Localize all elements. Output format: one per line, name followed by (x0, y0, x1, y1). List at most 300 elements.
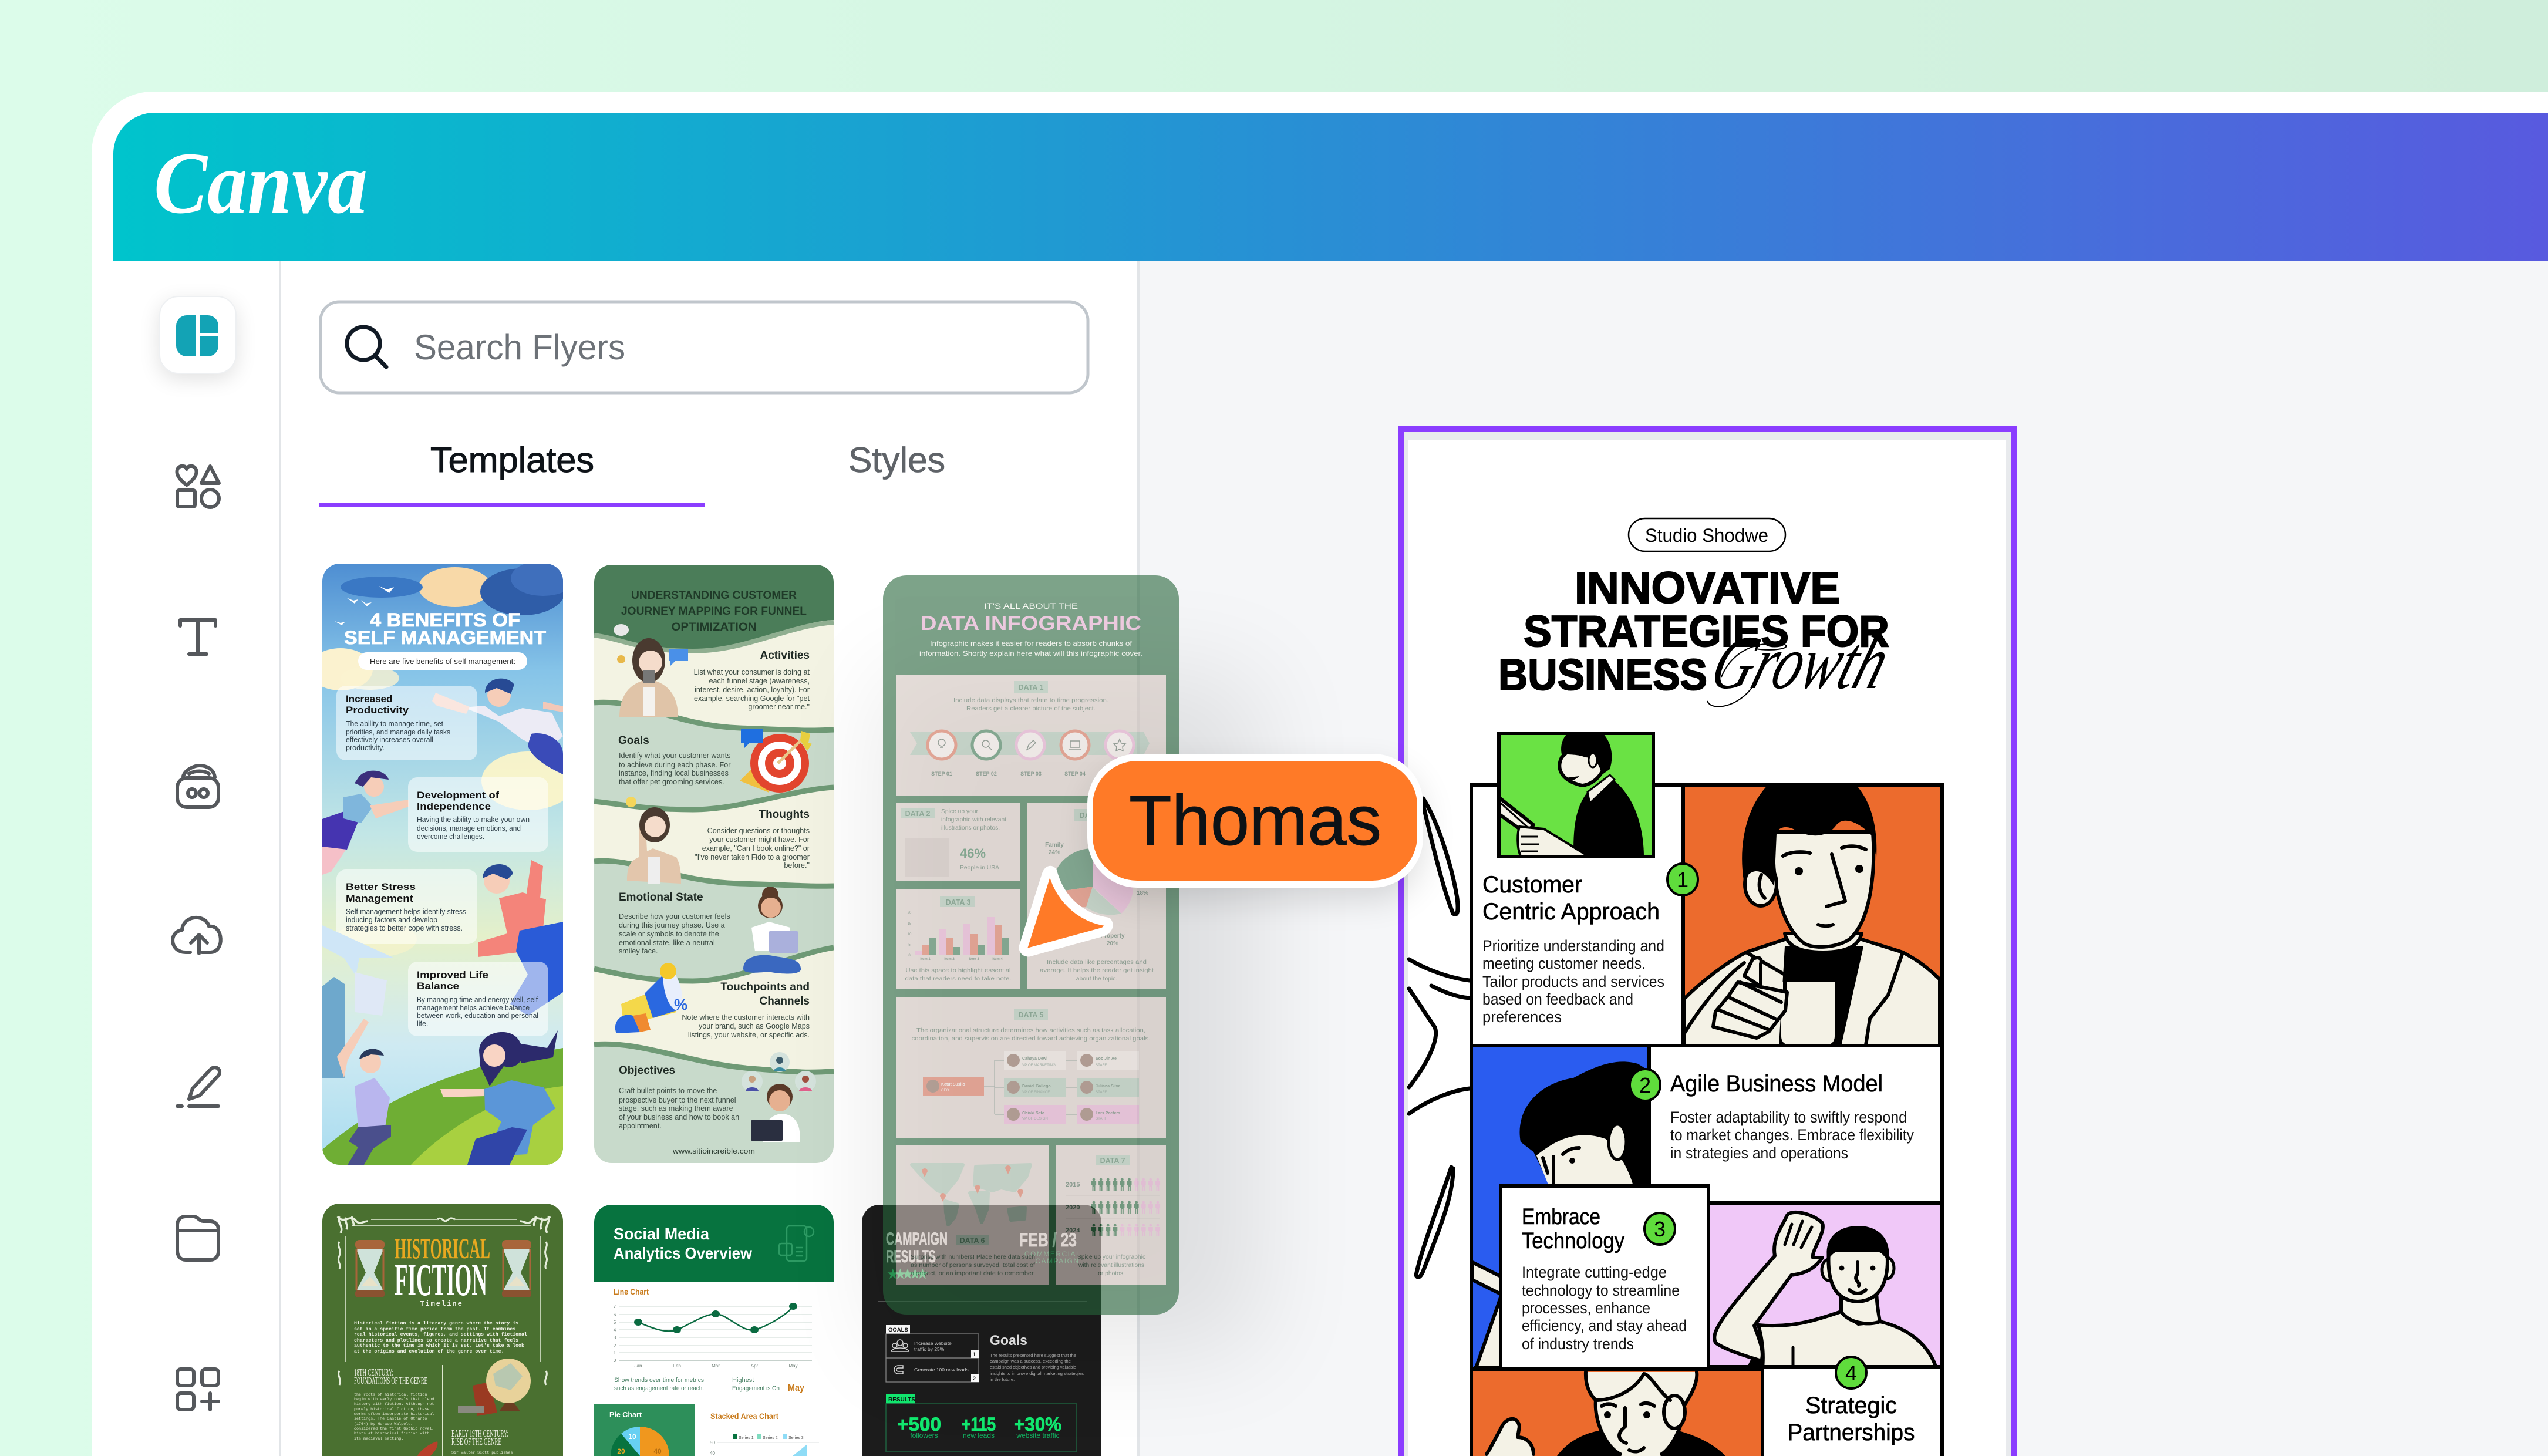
heading: UNDERSTANDING CUSTOMER (631, 589, 797, 602)
benefit: improved life balance: By managing time and energy well, self (417, 996, 538, 1004)
section: goals: that offer pet grooming services. (619, 778, 724, 786)
timeline entry (354, 1367, 434, 1441)
panel: data 4: 20% (1107, 941, 1118, 947)
org chart: STAFF (1096, 1063, 1107, 1067)
section: thoughts (695, 808, 810, 869)
title: Growth (1702, 620, 1900, 705)
panel: partnerships (1471, 1357, 1942, 1456)
illustration: pink panel man (1714, 1212, 1936, 1368)
section: emotional state: smiley face. (619, 947, 658, 955)
section: emotional state: scale or symbols to denote the (619, 930, 719, 938)
chart: bars: 15 (908, 922, 912, 926)
flyer in editor (1401, 429, 2014, 1456)
cursor arrow (1023, 870, 1108, 952)
illustration: megaphone: % (674, 996, 687, 1013)
panel: data 2: People in USA (960, 865, 999, 871)
chart: stacked area: Series 1 (739, 1436, 754, 1440)
heading: RESULTS (886, 1247, 936, 1266)
timeline entry: its medieval setting. (354, 1437, 403, 1441)
timeline entry: considered the first Gothic novel, (354, 1427, 434, 1431)
panel: data 1: Readers get a clearer picture of the subject. (966, 706, 1096, 712)
name tag: thomas (1087, 754, 1423, 888)
section: touchpoints: Touchpoints and (720, 981, 810, 993)
benefit: development of independence: decisions, manage emotions, and (417, 824, 521, 833)
chart: pie chart: Pie Chart (609, 1410, 642, 1419)
illustration: blue panel woman (1472, 1061, 1651, 1368)
chart: pie chart (594, 1404, 695, 1456)
benefit: development of independence: overcome challenges. (417, 833, 484, 841)
illustration: target (740, 729, 812, 793)
panel: data 4: 18% (1137, 890, 1148, 896)
panel: agile (1471, 1046, 1942, 1369)
template card: social media analytics (594, 1205, 834, 1456)
illustration: green panel man (1485, 725, 1653, 857)
chart note (614, 1377, 804, 1393)
chart: stacked area: 50 (710, 1440, 715, 1445)
heading: Timeline (420, 1300, 463, 1308)
org chart: Soo Jin Ae (1096, 1057, 1117, 1061)
panel: data 4: Include data like percentages and (1047, 959, 1147, 966)
search placeholder: Search Flyers (414, 328, 625, 367)
line art: background swooshes (1409, 798, 1470, 1277)
section: objectives: Craft bullet points to move the (619, 1087, 717, 1095)
logo: Canva (154, 134, 368, 232)
benefit: increased productivity: productivity. (346, 744, 385, 752)
heading: Embrace (1522, 1205, 1600, 1229)
drag shadow (883, 675, 1259, 1350)
card (1501, 1186, 1708, 1369)
heading: Analytics Overview (614, 1244, 752, 1262)
heading: Customer (1482, 872, 1582, 898)
panel: data 6: as number of persons surveyed, total cost of (911, 1262, 1035, 1269)
benefit: improved life balance (408, 962, 548, 1036)
illustration: building and hill (322, 972, 563, 1165)
chart: line chart: 7 (614, 1304, 616, 1309)
panel: templates (319, 261, 1140, 1456)
description: processes, enhance (1522, 1299, 1650, 1317)
chart note: such as engagement rate or reach. (614, 1385, 704, 1392)
panel: data 7: or photos. (1098, 1270, 1125, 1277)
panel: data 1: STEP 02 (976, 771, 997, 777)
illustration: thinking woman (626, 797, 681, 884)
dragged template: data infographic (883, 575, 1179, 1315)
panel: data 1: STEP 04 (1064, 771, 1086, 777)
panel: data 1 (896, 675, 1166, 796)
panel: data 1: STEP 03 (1020, 771, 1042, 777)
description: Foster adaptability to swiftly respond (1670, 1108, 1907, 1126)
heading: Partnerships (1787, 1420, 1915, 1445)
benefit: increased productivity: priorities, and manage daily tasks (346, 728, 450, 736)
benefit: improved life balance: Improved Life (417, 969, 488, 980)
section: emotional state (619, 891, 730, 955)
title: STRATEGIES FOR (1524, 606, 1889, 656)
description: in strategies and operations (1670, 1144, 1848, 1162)
chart: line chart: 1 (614, 1350, 616, 1356)
results panel: website traffic (1016, 1431, 1060, 1440)
results panel: RESULTS (888, 1397, 915, 1403)
section: thoughts: before." (784, 861, 810, 869)
description: efficiency, and stay ahead (1522, 1317, 1687, 1334)
heading: Technology (1522, 1229, 1624, 1253)
chart: bars: Item 1 (920, 958, 931, 961)
goals text: in the future. (990, 1377, 1015, 1382)
heading: HISTORICAL (395, 1232, 490, 1265)
illustration: megaphone (615, 963, 687, 1033)
intro text (354, 1320, 527, 1354)
benefit: development of independence: Development of (417, 790, 499, 801)
chart: stacked area: 40 (710, 1451, 715, 1456)
benefit: better stress management: Better Stress (346, 881, 416, 892)
benefit: improved life balance: Balance (417, 980, 459, 992)
section: activities: example, searching Google for "pet (694, 695, 810, 703)
results panel: +115 (962, 1414, 996, 1435)
benefit: better stress management: strategies to better cope with stress. (346, 924, 463, 932)
ornamental frame (338, 1216, 550, 1385)
timeline entry: 18TH CENTURY: (354, 1367, 393, 1378)
org chart: VP OF MARKETING (1022, 1063, 1056, 1067)
timeline entry 2: RISE OF THE GENRE (451, 1436, 501, 1447)
icon: analytics phone (779, 1226, 814, 1261)
chart note: Engagement is On (732, 1385, 780, 1392)
chart: bars: Item 2 (944, 958, 955, 961)
heading: Infographic makes it easier for readers to absorb chunks of (930, 639, 1133, 648)
chart: bars (908, 911, 1009, 961)
benefit: increased productivity: Productivity (346, 705, 409, 716)
icon: right hourglass (502, 1240, 531, 1297)
chart: line chart (614, 1287, 812, 1369)
benefit: development of independence: Having the ability to make your own (417, 815, 530, 824)
benefit: better stress management (336, 869, 477, 944)
panel: customer centric (1471, 725, 1942, 1046)
campaign tag: CAMPAIGN (1035, 1257, 1080, 1265)
heading: 4 BENEFITS OF (370, 609, 520, 631)
panel: data 2: 46% (960, 846, 986, 861)
description: of industry trends (1522, 1335, 1634, 1353)
timeline entry: FOUNDATIONS OF THE GENRE (354, 1375, 427, 1386)
illustration: running boy (478, 860, 563, 1016)
panel: data 4: average. It helps the reader get insight (1040, 968, 1154, 974)
section: touchpoints (682, 981, 810, 1039)
org chart: CEO (941, 1088, 949, 1093)
description (1522, 1263, 1687, 1353)
template card: customer journey (594, 565, 834, 1163)
chart: bars: Item 4 (992, 958, 1003, 961)
results panel: +30% (1014, 1414, 1061, 1435)
badge 3 (1644, 1213, 1675, 1245)
panel: data 4: 24% (1049, 850, 1060, 856)
benefit: improved life balance: life. (417, 1020, 428, 1028)
pictogram rows: 2020 (1066, 1204, 1080, 1211)
benefit: increased productivity: The ability to manage time, set (346, 720, 444, 728)
illustration: woman with phone (614, 624, 688, 717)
results panel: new leads (963, 1431, 995, 1440)
icon: text (180, 620, 215, 654)
chart: bars: 20 (908, 911, 912, 915)
title: BUSINESS (1498, 650, 1707, 699)
illustration: globe and books (458, 1359, 531, 1416)
heading: FEB / 23 (1019, 1229, 1077, 1251)
description: Prioritize understanding and (1482, 937, 1664, 955)
heading (1482, 872, 1660, 925)
panel: data 4: about the topic. (1076, 976, 1117, 982)
section: touchpoints: listings, your website, or specific ads. (688, 1031, 810, 1039)
heading: IT'S ALL ABOUT THE (984, 602, 1078, 611)
chart: line chart: Mar (712, 1363, 720, 1369)
canvas area (1138, 261, 2548, 1456)
icon: camera (177, 766, 218, 807)
section: activities: interest, desire, action, loyalty). For (695, 686, 810, 694)
section: goals: Goals (618, 734, 649, 747)
heading (344, 609, 546, 648)
badge 4: 4 (1845, 1361, 1857, 1385)
heading: Agile Business Model (1670, 1071, 1883, 1097)
template card: self management (322, 564, 563, 1165)
panel: data 5: DATA 5 (1019, 1011, 1043, 1019)
pictogram rows (1066, 1178, 1162, 1238)
icon: draw (177, 1067, 220, 1106)
template card: campaign results (862, 1205, 1101, 1456)
section: activities: groomer near me." (748, 703, 810, 711)
panel: data 1: DATA 1 (1019, 683, 1043, 692)
panel: data 1: Include data displays that relate to time progression. (953, 697, 1108, 704)
badge 3: 3 (1654, 1217, 1666, 1241)
tab: styles: Styles (848, 440, 945, 480)
badge 1 (1667, 864, 1698, 895)
chart note: May (788, 1382, 804, 1393)
illustration: running girl (440, 1030, 558, 1165)
section: activities (694, 649, 810, 711)
panel: data 3: Use this space to highlight essential (905, 968, 1011, 974)
panel: data 4 (1027, 803, 1166, 989)
illustration: woman with laptop (743, 887, 801, 973)
org chart (923, 1051, 1139, 1124)
heading (919, 602, 1142, 658)
goals list: traffic by 25% (914, 1346, 945, 1352)
org chart: Chiaki Sato (1022, 1111, 1044, 1115)
section: objectives: prospective buyer to the next funnel (619, 1096, 736, 1104)
panel: data 2: infographic with relevant (941, 817, 1006, 823)
panel: data 1: STEP 01 (931, 771, 952, 777)
chart: bars: 0 (908, 954, 911, 958)
section: thoughts: Thoughts (759, 808, 810, 821)
section: goals (618, 734, 730, 786)
results panel: followers (910, 1431, 938, 1440)
heading: CAMPAIGN (886, 1229, 948, 1249)
panel: data 4: Property (1100, 933, 1125, 939)
heading: JOURNEY MAPPING FOR FUNNEL (621, 605, 807, 618)
timeline entry 2: Sir Walter Scott publishes (451, 1451, 513, 1455)
section: objectives (619, 1064, 739, 1130)
chart: line chart: Jan (635, 1363, 642, 1369)
timeline entry 2: EARLY 19TH CENTURY: (451, 1428, 508, 1439)
timeline entry: history with fiction. Although not (354, 1402, 434, 1407)
chart: pie (1052, 848, 1133, 915)
goals text: The results presented here suggest that the (990, 1353, 1076, 1358)
benefit: better stress management: inducing factors and develop (346, 916, 437, 924)
heading: information. Shortly explain here what will this infographic cover. (919, 649, 1142, 658)
subtitle pill (358, 652, 527, 670)
intro text: set in a specific time period from the past. It combines (354, 1326, 515, 1332)
intro text: authentic to the time in which it is set. Let's take a look (354, 1343, 524, 1349)
panel: data 5: The organizational structure determines how activities such as task allocation, (916, 1027, 1145, 1034)
description: technology to streamline (1522, 1282, 1680, 1299)
icon: left hourglass (355, 1240, 385, 1297)
section: touchpoints: Note where the customer interacts with (682, 1013, 810, 1022)
sidebar (160, 261, 281, 1456)
description (1670, 1108, 1914, 1162)
panel: data 6: DATA 6 (960, 1236, 985, 1245)
heading (395, 1232, 490, 1308)
goals list: 2 (973, 1376, 976, 1381)
section: thoughts: example, "Can I book online?" or (702, 844, 810, 852)
section: emotional state: Emotional State (619, 891, 703, 904)
section: activities: Activities (760, 649, 810, 662)
heading (886, 1229, 1077, 1266)
chart: stacked area: Series 2 (763, 1436, 778, 1440)
timeline entry: hints at historical fiction with (354, 1431, 429, 1436)
panel: data 7: DATA 7 (1100, 1157, 1125, 1165)
goals list (886, 1325, 979, 1382)
description: preferences (1482, 1008, 1562, 1026)
chart: bars: Item 3 (969, 958, 979, 961)
benefit: improved life balance: management helps achieve balance (417, 1004, 530, 1012)
description: Tailor products and services (1482, 973, 1664, 990)
name tag: thomas: Thomas (1129, 780, 1381, 860)
timeline entry: works often incorporate historical (354, 1412, 434, 1417)
description: Integrate cutting-edge (1522, 1263, 1667, 1281)
section: emotional state: during this journey phase. Use a (619, 921, 725, 929)
chart: pie chart: 20 (617, 1447, 625, 1455)
title: INNOVATIVE (1575, 563, 1840, 612)
timeline entry: (1764) by Horace Walpole, (354, 1422, 413, 1427)
header bar (113, 113, 2548, 261)
section: thoughts: "I've never taken Fido to a groomer (695, 853, 810, 861)
org chart: Daniel Gallego (1022, 1084, 1051, 1088)
chart note: Show trends over time for metrics (614, 1377, 704, 1384)
benefit: better stress management: Management (346, 893, 413, 904)
section: objectives: of your business and how to book an (619, 1113, 739, 1121)
heading (614, 1225, 752, 1262)
results panel (886, 1394, 1077, 1452)
heading: Centric Approach (1482, 899, 1660, 925)
description (1482, 937, 1664, 1026)
header band (594, 565, 834, 651)
chart: stacked area (710, 1411, 819, 1456)
results panel: +500 (897, 1414, 941, 1435)
chart: line chart: Line Chart (614, 1287, 649, 1296)
section: activities: each funnel stage (awareness, (709, 677, 810, 685)
world map (912, 1165, 1030, 1225)
chart: stacked area: Series 3 (788, 1436, 804, 1440)
org chart: Juliana Silva (1096, 1084, 1121, 1088)
intro text: at the origins and evolution of the genre over time. (354, 1349, 504, 1354)
description: to market changes. Embrace flexibility (1670, 1126, 1914, 1144)
benefit: better stress management: Self management helps identify stress (346, 908, 466, 916)
timeline entry: settings. The Castle of Otranto (354, 1417, 427, 1421)
illustration: flying boy (432, 679, 563, 774)
badge 1: 1 (1677, 868, 1688, 892)
tag: studio: Studio Shodwe (1645, 525, 1768, 546)
active tool button (160, 296, 236, 379)
wave strokes (594, 702, 834, 1072)
section: goals: Identify what your customer wants (619, 751, 730, 760)
goals list: Generate 100 new leads (914, 1367, 969, 1373)
heading: SELF MANAGEMENT (344, 627, 546, 648)
chart: line chart: May (788, 1363, 798, 1369)
badge 4 (1836, 1357, 1866, 1388)
chart: stacked area: Stacked Area Chart (710, 1411, 778, 1421)
timeline entry 2 (451, 1428, 513, 1455)
benefit: improved life balance: between work, education and personal (417, 1012, 538, 1020)
panel: data 2: Spice up your (941, 808, 979, 815)
chart: line chart: Feb (673, 1363, 681, 1369)
campaign tag: COMMERCIAL (1024, 1250, 1081, 1258)
heading (1522, 1205, 1624, 1253)
panel: data 7: Spice up your infographic (1077, 1254, 1145, 1260)
panel: data 6 (896, 1145, 1049, 1285)
panel: data 5: coordination, and supervision are directed toward achieving organizational goals. (911, 1036, 1151, 1042)
heading: Social Media (614, 1225, 709, 1243)
illustration: bottom panel man (1485, 1372, 1725, 1456)
section: emotional state: emotional state, like a neutral (619, 939, 715, 947)
illustration: woman on phone (742, 1052, 816, 1142)
badge 2: 2 (1639, 1073, 1651, 1097)
timeline entry: the roots of historical fiction (354, 1393, 427, 1397)
benefit: increased productivity (336, 686, 477, 760)
benefit: increased productivity: effectively increases overall (346, 736, 433, 744)
panel: technology (1501, 1186, 1942, 1369)
section: objectives: stage, such as making them aware (619, 1104, 733, 1113)
search box (321, 302, 1088, 393)
chart: line chart: 3 (614, 1335, 616, 1340)
chart: bars: 10 (908, 933, 912, 936)
chart: pie chart: 10 (628, 1433, 636, 1441)
step pins (928, 731, 1134, 759)
org chart: Lars Peeters (1096, 1111, 1120, 1115)
title (1498, 563, 1900, 707)
tag: studio (1629, 518, 1785, 551)
panel: data 4: DATA 4 (1080, 811, 1104, 820)
chart: line chart: 2 (614, 1343, 616, 1349)
panel: data 2: DATA 2 (905, 810, 930, 818)
chart: line chart: 4 (614, 1327, 616, 1333)
goals list: GOALS (888, 1327, 908, 1333)
section: thoughts: your customer might have. For (709, 835, 810, 844)
template card: historical fiction: FICTION (395, 1254, 487, 1305)
org chart: VP OF DESIGN (1022, 1117, 1048, 1121)
org chart: Ketut Susilo (941, 1083, 965, 1087)
panel: data 2: illustrations or photos. (941, 825, 1000, 831)
timeline entry: purely historical fiction, these (354, 1407, 429, 1412)
chart: pie chart: 40 (653, 1447, 662, 1455)
org chart: STAFF (1096, 1117, 1107, 1121)
timeline entry: begin with early novels that blend (354, 1397, 434, 1402)
section: goals: to achieve during each phase. For (619, 761, 730, 769)
illustration: flying girl (322, 771, 409, 875)
illustration: orange panel man (1683, 763, 1942, 1046)
section: thoughts: Consider questions or thoughts (707, 827, 810, 835)
rating stars: ★★★★★ (887, 1266, 929, 1282)
icon: search (347, 327, 386, 367)
website: www.sitioincreible.com (672, 1147, 755, 1155)
panel: data 5 (896, 997, 1166, 1138)
benefit: development of independence (408, 777, 548, 852)
chart: line chart: 5 (614, 1320, 616, 1325)
panel: data 4: Family (1045, 842, 1064, 848)
benefit: development of independence: Independence (417, 801, 491, 812)
description: meeting customer needs. (1482, 955, 1646, 972)
section: emotional state: Describe how your customer feels (619, 912, 730, 921)
